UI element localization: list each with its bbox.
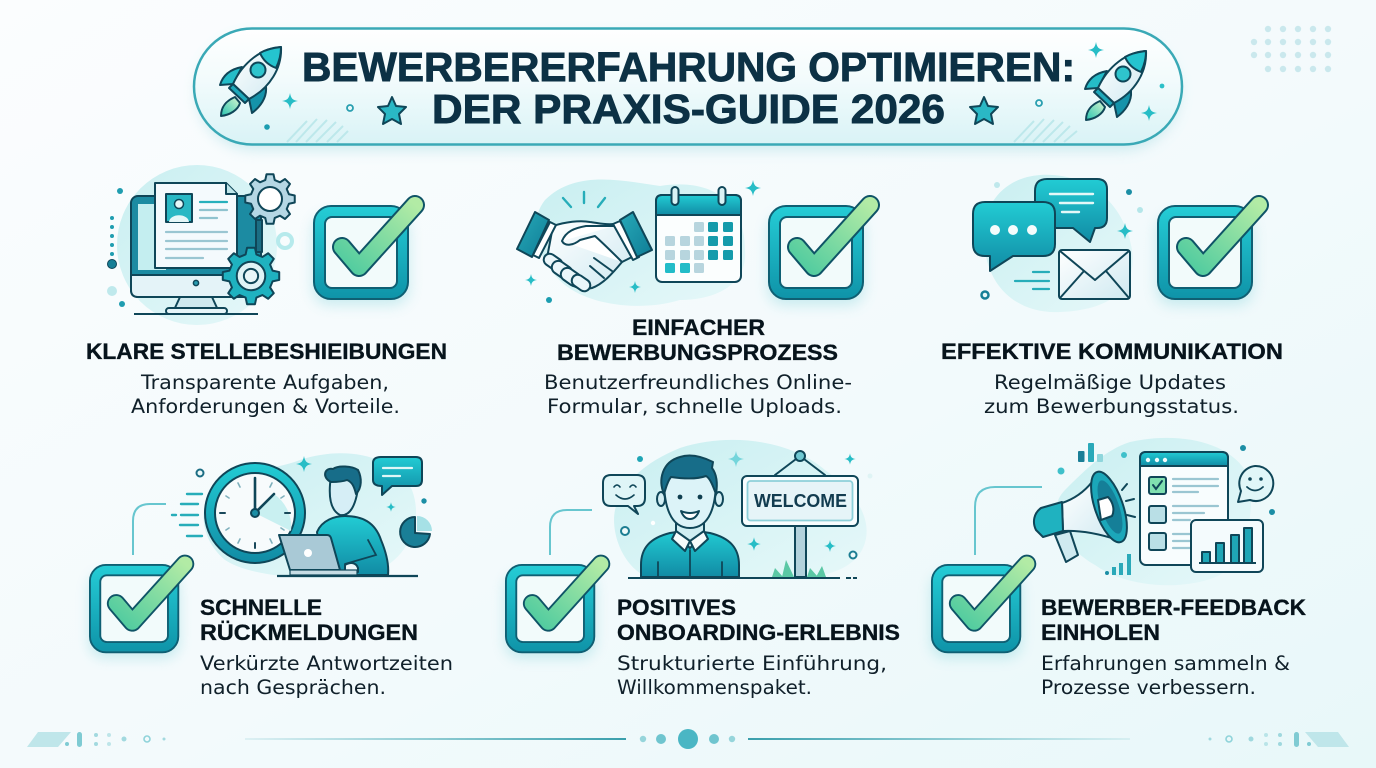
heading	[557, 315, 838, 365]
panel: Einfacher Bewerbungsprozess	[517, 179, 870, 418]
heading: BEWERBER-FEEDBACK	[1041, 595, 1307, 620]
heading	[617, 595, 900, 645]
description: Erfahrungen sammeln &	[1041, 652, 1290, 675]
icon: right rocket	[1085, 51, 1146, 120]
description: Transparente Aufgaben,	[140, 371, 389, 394]
icon: left rocket	[220, 47, 281, 116]
icon: handshake and calendar	[517, 179, 761, 306]
description	[544, 371, 852, 418]
description	[1041, 652, 1290, 699]
icon: right star	[970, 97, 998, 124]
icon: checkbox	[505, 564, 601, 658]
heading	[200, 595, 418, 645]
banner sparkles	[264, 42, 1164, 130]
icon: checkbox	[931, 564, 1027, 658]
heading: RÜCKMELDUNGEN	[200, 620, 418, 645]
panel: Klare Stellenbeschreibungen	[86, 165, 447, 418]
icon: chat bubbles and envelope	[973, 175, 1143, 312]
description: Prozesse verbessern.	[1041, 676, 1256, 699]
description	[131, 371, 400, 418]
banner hatch decoration	[287, 119, 1077, 142]
description: Formular, schnelle Uploads.	[547, 395, 842, 418]
heading: POSITIVES	[617, 595, 736, 620]
description: Regelmäßige Updates	[994, 371, 1226, 394]
decorative dot grid	[1251, 26, 1331, 72]
icon: monitor with CV and gears	[107, 165, 295, 325]
connector line	[133, 504, 166, 555]
heading: ONBOARDING-ERLEBNIS	[617, 620, 900, 645]
title	[302, 44, 1075, 132]
connector line	[550, 510, 592, 555]
description: Benutzerfreundliches Online-	[544, 371, 852, 394]
icon: checkbox	[768, 205, 870, 305]
panel: Positives Onboarding-Erlebnis	[505, 440, 900, 699]
heading: EFFEKTIVE KOMMUNIKATION	[941, 339, 1283, 364]
title: DER PRAXIS-GUIDE 2026	[432, 86, 945, 132]
icon: checkbox	[313, 205, 415, 305]
panel: Effektive Kommunikation	[941, 175, 1283, 418]
title: BEWERBERERFAHRUNG OPTIMIEREN:	[302, 44, 1075, 90]
icon: checkbox	[89, 564, 185, 658]
description	[984, 371, 1239, 418]
description: Verkürzte Antwortzeiten	[200, 652, 453, 675]
heading	[1041, 595, 1307, 645]
heading: EINFACHER	[632, 315, 765, 340]
heading: KLARE STELLEBESHIEIBUNGEN	[86, 339, 447, 364]
sign text: WELCOME	[754, 491, 847, 511]
icon: checkbox	[1157, 205, 1259, 305]
title banner	[194, 28, 1182, 150]
description	[200, 652, 453, 699]
heading: EINHOLEN	[1041, 620, 1160, 645]
icon: clock and person at laptop	[172, 453, 432, 578]
footer decoration	[27, 729, 1349, 749]
heading: BEWERBUNGSPROZESS	[557, 340, 838, 365]
description: Anforderungen & Vorteile.	[131, 395, 400, 418]
description: zum Bewerbungsstatus.	[984, 395, 1239, 418]
description: Willkommenspaket.	[617, 676, 812, 699]
panel: Bewerber-Feedback einholen	[931, 438, 1307, 699]
heading: SCHNELLE	[200, 595, 322, 620]
description	[617, 652, 887, 699]
icon: left star	[378, 97, 406, 124]
connector line	[975, 487, 1042, 555]
icon: welcoming person with sign	[603, 440, 872, 578]
icon: megaphone, survey and chart	[1034, 438, 1275, 585]
description: Strukturierte Einführung,	[617, 652, 887, 675]
description: nach Gesprächen.	[200, 676, 386, 699]
panel: Schnelle Rückmeldungen	[89, 453, 453, 699]
